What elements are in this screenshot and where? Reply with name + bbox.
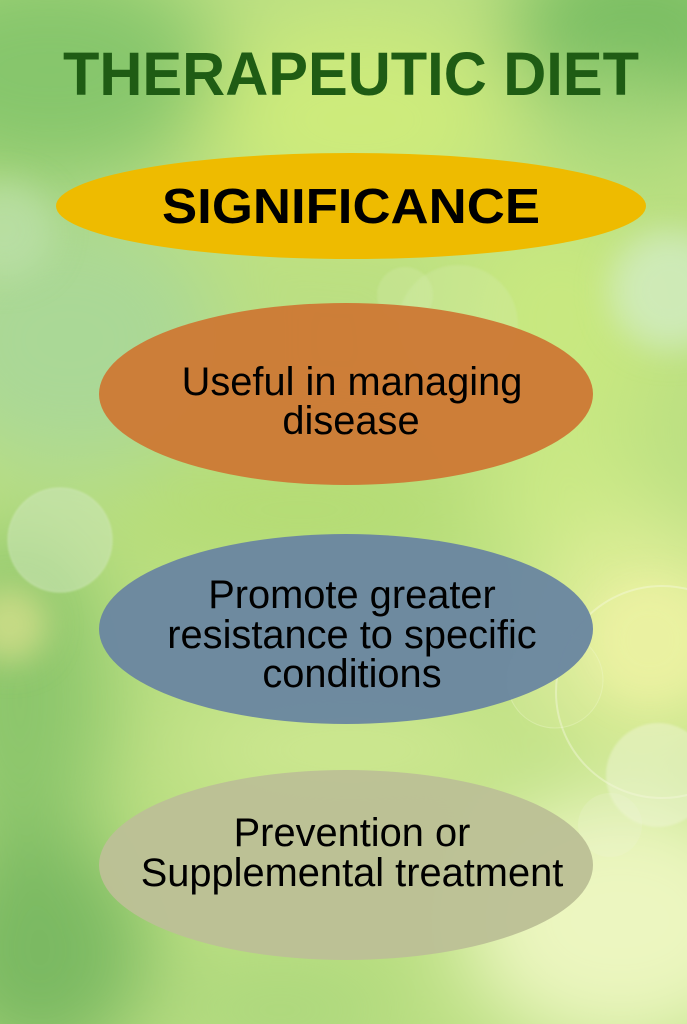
oval: promote greater resistance: Promote greater bbox=[208, 573, 496, 617]
oval: useful in managing disease: Useful in managing bbox=[182, 360, 522, 404]
title: THERAPEUTIC DIET bbox=[63, 40, 639, 108]
oval: promote greater resistance: conditions bbox=[262, 652, 442, 696]
oval: useful in managing disease bbox=[99, 303, 593, 485]
heading oval: significance bbox=[56, 153, 646, 259]
heading oval: significance: SIGNIFICANCE bbox=[162, 180, 540, 234]
oval: promote greater resistance bbox=[99, 534, 593, 724]
oval: prevention or supplemental treatment: Prevention or bbox=[234, 811, 470, 855]
oval: prevention or supplemental treatment bbox=[99, 770, 593, 960]
oval: promote greater resistance: resistance to specific bbox=[167, 613, 537, 657]
oval: useful in managing disease: disease bbox=[282, 399, 420, 443]
bokeh circles bbox=[8, 265, 687, 857]
oval: prevention or supplemental treatment: Supplemental treatment bbox=[141, 851, 563, 895]
